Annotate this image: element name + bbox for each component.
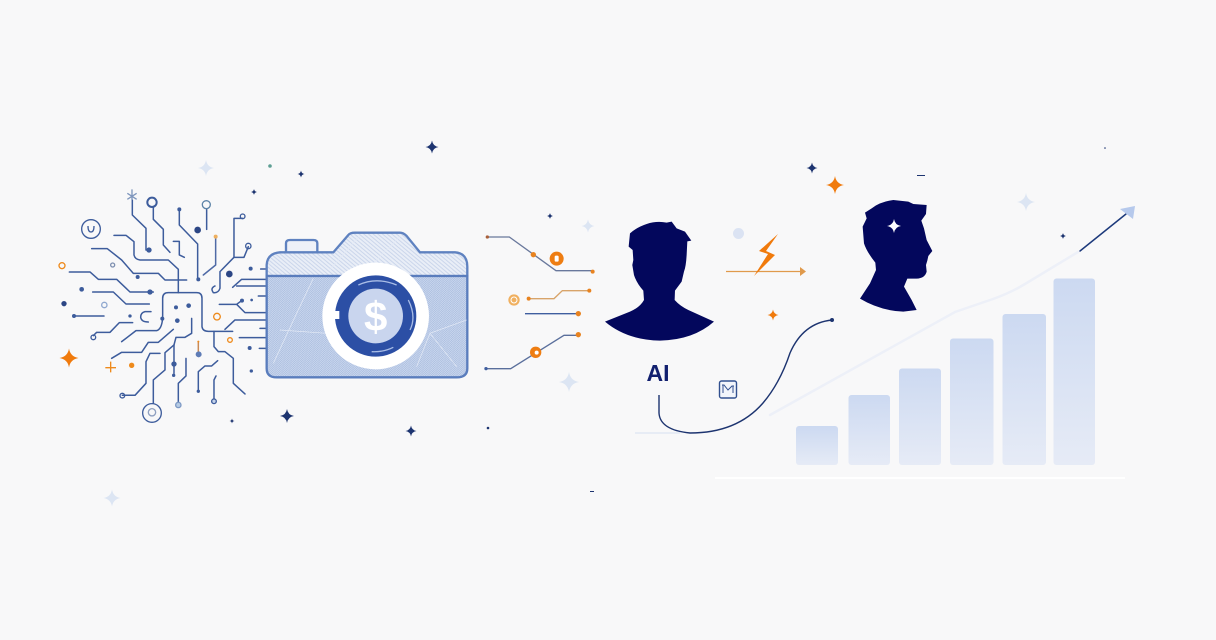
camera [267,233,467,377]
sparkles [60,140,1106,506]
AI label: AI [646,360,670,386]
person silhouette left [605,222,714,341]
chart baseline [715,477,1125,479]
lens [322,263,429,369]
lightning arrow [726,234,806,276]
curved navy arrow [635,318,834,433]
bar chart [796,278,1095,465]
dollar sign: $ [364,293,387,340]
camera viewfinder [286,240,317,252]
camera top band [267,233,467,276]
pale dot [733,228,744,239]
camera body [267,276,467,377]
person silhouette right [860,200,932,312]
mail icon [720,381,736,398]
circuit network [59,189,270,422]
connector lines [484,235,595,370]
rising trend line [770,206,1135,415]
